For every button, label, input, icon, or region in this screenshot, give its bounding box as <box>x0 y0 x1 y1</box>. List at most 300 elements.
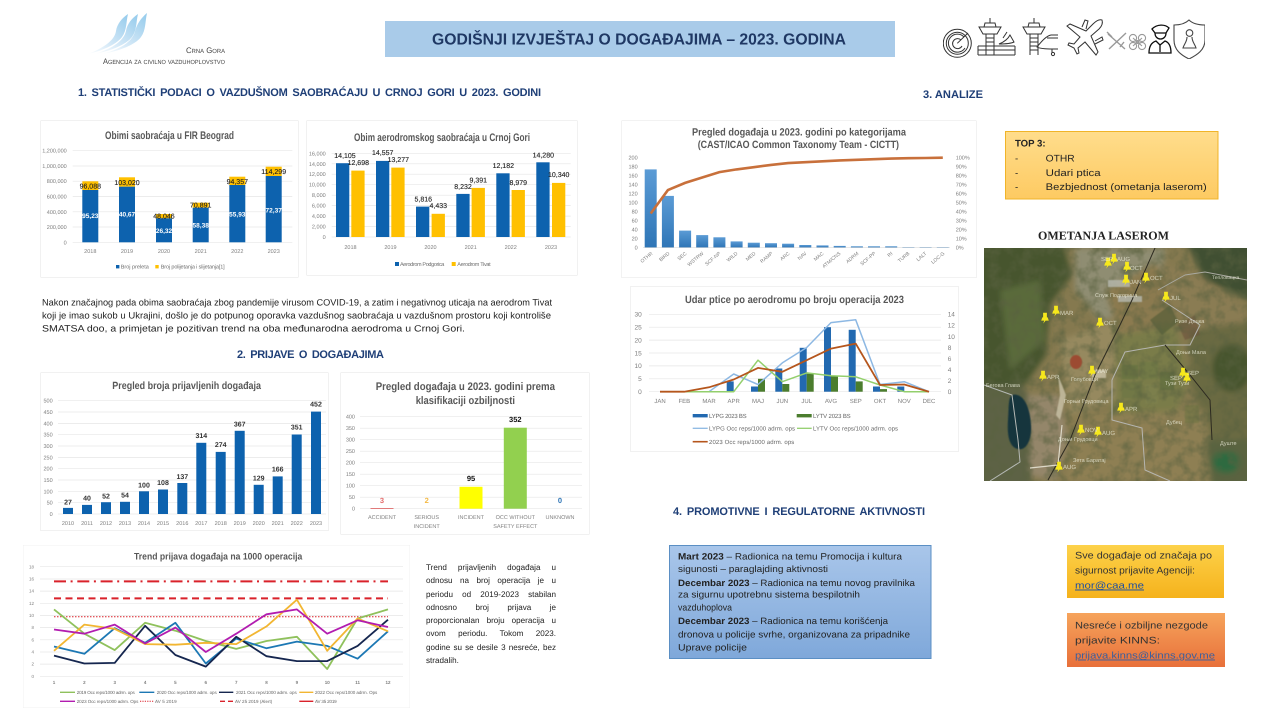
legend: 2020 Occ reps/1000 adrm. ops <box>157 690 217 695</box>
x axis labels: 1 <box>53 680 56 685</box>
left axis labels <box>629 156 638 252</box>
right axis labels: 100% <box>956 156 970 162</box>
category labels: NOV <box>898 398 911 405</box>
x axis labels: 4 <box>144 680 147 685</box>
pin labels: JAN <box>1130 279 1141 286</box>
category labels: 2018 <box>344 245 357 251</box>
category labels: 2011 <box>81 521 93 527</box>
terrain <box>984 248 1247 481</box>
heading: section 2: 2. PRIJAVE O DOGAĐAJIMA <box>237 349 384 361</box>
left axis labels: 10 <box>634 363 642 370</box>
callout text <box>1015 138 1207 193</box>
y axis labels: 8 <box>31 625 34 630</box>
y axis labels <box>309 151 326 241</box>
category labels: 2020 <box>253 521 265 527</box>
y axis labels: 400 <box>44 421 53 427</box>
texture <box>984 248 1247 481</box>
y axis labels: 16,000 <box>309 151 326 157</box>
category labels: OKT <box>874 398 886 405</box>
x axis labels <box>53 680 391 685</box>
category labels: 2019 <box>384 245 397 251</box>
trend paragraph: periodu od 2019-2023 stabilan <box>426 590 556 599</box>
heading: section 1: 1. STATISTIČKI PODACI O VAZDUŠNOM SAOBRAĆAJU U CRNOJ GORI U 2023. GODINI <box>78 86 541 99</box>
pin labels: AUG <box>1063 464 1076 471</box>
category labels <box>344 245 557 251</box>
category labels: SCF-NP <box>704 251 723 268</box>
legend <box>693 413 898 446</box>
data labels: 52 <box>102 494 110 500</box>
data labels: 5,816 <box>415 196 432 204</box>
category labels: OCC WITHOUT <box>496 515 536 521</box>
intro paragraph: SMATSA doo, a primjetan je pozitivan trend na oba međunarodna aerodroma u Crnoj Gori. <box>42 324 465 334</box>
x axis labels: 6 <box>205 680 208 685</box>
trend paragraph: odnosu na broj operacija je u <box>426 576 556 585</box>
category labels: RI <box>887 251 894 259</box>
y axis labels: 14 <box>29 589 34 594</box>
logo text: state: Crna Gora <box>186 46 225 55</box>
logo text: agency name: Agencija za civilno vazduhoplovstvo <box>103 57 225 66</box>
data labels: 48,046 <box>153 214 175 220</box>
x axis labels: 11 <box>355 680 360 685</box>
y axis labels: 300 <box>346 438 355 444</box>
category labels: 2017 <box>195 521 207 527</box>
callout text: TOP 3: <box>1015 138 1046 150</box>
data labels: 14,557 <box>372 150 394 157</box>
y axis labels: 8,000 <box>312 193 326 199</box>
y axis labels: 100 <box>346 484 355 490</box>
category labels: 2020 <box>424 245 437 251</box>
category labels: NAV <box>797 251 809 262</box>
data labels: 129 <box>253 476 265 482</box>
category labels <box>654 398 936 405</box>
right axis labels: 50% <box>956 201 967 207</box>
icon: officer <box>1149 25 1171 53</box>
category labels: 2016 <box>176 521 188 527</box>
category labels: FEB <box>678 398 690 405</box>
category labels: 2014 <box>138 521 150 527</box>
activity list: Mart 2023 – Radionica na temu Promocija i kultura <box>678 552 903 562</box>
y axis labels: 12,000 <box>309 172 326 178</box>
category labels: LALT <box>916 251 928 263</box>
trend paragraph <box>426 561 556 668</box>
category labels: SCF-PP <box>859 251 878 267</box>
legend: 2023 Occ reps/1000 adrm. ops <box>709 439 794 446</box>
y axis labels: 0 <box>64 240 67 246</box>
trend paragraph: odnosno broj prijava je <box>426 603 556 612</box>
y axis labels: 250 <box>44 455 53 461</box>
legend: LYTV Occ reps/1000 adrm. ops <box>813 426 898 432</box>
data labels: 114,299 <box>261 169 286 176</box>
icon: light aircraft <box>1107 32 1126 49</box>
callout text: prijavite KINNS: <box>1075 636 1160 646</box>
callout text: - <box>1015 154 1018 164</box>
data labels <box>80 169 286 235</box>
legend <box>60 690 378 704</box>
legend: Broj preleta <box>121 265 150 271</box>
category labels <box>368 515 575 530</box>
y axis labels: 150 <box>44 478 53 484</box>
lake <box>1008 395 1031 449</box>
title banner: GODIŠNJI IZVJEŠTAJ O DOGAĐAJIMA – 2023. GODINA <box>432 30 846 48</box>
activity list: za sigurnu upotrebnu sistema bespilotnih <box>678 590 860 600</box>
icon: shield with pawn <box>1174 20 1205 59</box>
y axis labels: 350 <box>44 433 53 439</box>
data labels: 40,67 <box>119 212 136 219</box>
category labels: 2022 <box>291 521 303 527</box>
chart: reported events per year <box>40 372 328 531</box>
left axis labels: 60 <box>632 219 638 225</box>
left axis labels: 15 <box>634 350 642 357</box>
data labels: 3 <box>380 496 384 505</box>
category labels: APR <box>728 398 741 405</box>
callout text: Udari ptica <box>1046 168 1101 179</box>
icon: airliner <box>1067 20 1103 55</box>
category labels: AVG <box>825 398 837 405</box>
category labels: DEC <box>923 398 936 405</box>
legend: 2021 Occ reps/1000 adrm. ops <box>236 690 297 695</box>
y axis labels: 1,000,000 <box>42 164 67 170</box>
data labels <box>64 402 322 506</box>
y axis labels: 0 <box>352 507 355 513</box>
bars <box>645 169 949 248</box>
data labels: 70,891 <box>190 202 212 210</box>
category labels: WSTRW <box>687 251 705 268</box>
legend: AV 5 2019 <box>155 699 177 704</box>
data labels: 95,23 <box>82 213 99 220</box>
right axis labels: 60% <box>956 192 967 198</box>
left axis labels: 20 <box>632 237 638 243</box>
category labels: 2018 <box>84 249 96 255</box>
pin labels: APR <box>1047 374 1060 381</box>
map: laser interference locations <box>984 248 1247 481</box>
category labels: UNKNOWN <box>545 515 575 521</box>
place names <box>986 275 1240 464</box>
place names: Бегова Глава <box>986 383 1021 389</box>
category labels: 2015 <box>157 521 169 527</box>
y axis labels: 50 <box>349 495 355 501</box>
data labels: 12,698 <box>348 160 369 167</box>
category labels: RAMP <box>759 251 775 265</box>
legend: AV 25 2019 (Alert) <box>235 699 273 704</box>
category labels: ADRM <box>845 251 860 265</box>
category labels: ARC <box>779 251 792 262</box>
right axis labels <box>948 312 955 396</box>
data labels: 55,93 <box>229 211 246 218</box>
right axis labels: 2 <box>948 378 952 385</box>
left axis labels: 140 <box>629 183 638 189</box>
legend: AV 35 2019 <box>315 699 337 704</box>
data labels <box>334 150 570 210</box>
x axis labels: 7 <box>235 680 238 685</box>
data labels <box>380 415 562 505</box>
light built-up areas <box>1056 280 1142 420</box>
y axis labels: 250 <box>346 449 355 455</box>
pin labels: OCT <box>1104 320 1117 327</box>
place names: Доњи Мала <box>1176 350 1207 356</box>
category labels: JUL <box>801 398 813 405</box>
category labels: 2012 <box>100 521 112 527</box>
right axis labels: 90% <box>956 165 967 171</box>
x axis labels: 2 <box>83 680 86 685</box>
data labels: 137 <box>176 474 188 481</box>
data labels: 0 <box>558 496 562 505</box>
data labels: 274 <box>215 442 227 449</box>
data labels: 108 <box>157 480 169 487</box>
data labels: 72,37 <box>266 207 282 214</box>
trend paragraph: Trend prijavljenih događaja u <box>426 563 556 572</box>
chart title: Obimi saobraćaja u FIR Beograd <box>105 130 234 142</box>
right axis labels: 0% <box>956 246 964 252</box>
chart title <box>376 381 556 407</box>
category labels: 2023 <box>268 249 280 255</box>
category labels: WILD <box>726 251 740 264</box>
chart title: Pregled broja prijavljenih događaja <box>112 380 261 392</box>
y axis labels: 400 <box>346 415 355 421</box>
data labels: 100 <box>138 482 150 490</box>
data labels: 26,32 <box>156 228 173 235</box>
data labels: 96,088 <box>80 184 101 190</box>
place names: Горњи Грудовица <box>1064 399 1109 405</box>
pin labels: JUL <box>1170 295 1181 302</box>
right axis labels: 6 <box>948 356 952 363</box>
y axis labels: 10,000 <box>309 183 326 189</box>
right axis labels: 4 <box>948 367 952 374</box>
left axis labels: 5 <box>638 376 642 383</box>
activity list: Uprave policije <box>678 643 747 653</box>
callout text: sigurnost prijavite Agenciji: <box>1075 566 1195 576</box>
right axis labels: 30% <box>956 219 967 225</box>
legend: 2022 Occ reps/1000 adrm. Ops <box>315 690 378 695</box>
callout text: Nesreće i ozbiljne nezgode <box>1075 620 1208 632</box>
category labels: 2019 <box>234 521 246 527</box>
category labels <box>62 521 322 527</box>
data labels: 95 <box>467 474 475 483</box>
y axis labels: 200,000 <box>47 225 67 231</box>
trend paragraph: ovom periodu. Tokom 2023. <box>426 629 556 638</box>
legend: Broj polijetanja i slijetanja[1] <box>161 265 225 271</box>
chart: report trend per 1000 operations <box>23 545 410 708</box>
right axis labels: 20% <box>956 228 967 234</box>
icon: control tower and aircraft <box>1023 18 1058 56</box>
callout: report to agency <box>1067 545 1224 598</box>
category labels: 2013 <box>119 521 131 527</box>
place names: Голубовци <box>1071 376 1098 383</box>
right axis labels: 70% <box>956 183 967 189</box>
data labels: 4,433 <box>430 203 447 210</box>
left axis labels <box>634 312 642 396</box>
category labels: 2023 <box>310 521 322 527</box>
category labels: MAC <box>813 251 826 263</box>
data labels: 54 <box>121 492 129 500</box>
intro paragraph: Nakon značajnog pada obima saobraćaja zbog pandemije virusom COVID-19, a zatim i negativnog uticaja na aerodrom Tivat <box>42 298 552 308</box>
icon: radar <box>943 29 971 57</box>
place names: Душте <box>1220 441 1237 447</box>
chart title: Trend prijava događaja na 1000 operacija <box>134 552 303 562</box>
y axis labels <box>346 415 355 513</box>
y axis labels: 50 <box>47 501 53 507</box>
y axis labels: 200 <box>346 461 355 467</box>
pin labels: SEP <box>1101 256 1113 263</box>
y axis labels <box>42 149 67 246</box>
chart: FIR Beograd traffic <box>40 120 298 278</box>
pin labels: AUG <box>1102 430 1115 437</box>
legend: LYTV 2023 BS <box>813 413 851 420</box>
y axis labels: 100 <box>44 489 53 495</box>
trend paragraph: proporcionalan broju operacija u <box>426 616 556 625</box>
y axis labels: 400,000 <box>47 210 67 216</box>
x axis labels: 3 <box>113 680 116 685</box>
category labels: INCIDENT <box>458 515 485 521</box>
activity list: Decembar 2023 – Radionica na temu novog pravilnika <box>678 578 916 588</box>
activity list: vazduhoplova <box>678 603 733 613</box>
right axis labels: 80% <box>956 174 967 180</box>
x axis labels: 9 <box>296 680 299 685</box>
right axis labels: 10% <box>956 237 967 243</box>
y axis labels: 2 <box>31 662 34 667</box>
intro paragraph <box>42 298 552 334</box>
left axis labels: 160 <box>629 174 638 180</box>
lines <box>660 320 929 392</box>
data labels: 8,232 <box>454 184 472 191</box>
y axis labels: 16 <box>29 577 34 582</box>
legend: LYPG 2023 BS <box>709 413 747 420</box>
clustered bars <box>336 161 565 237</box>
right axis labels: 14 <box>948 312 955 319</box>
category labels: 2010 <box>62 521 74 527</box>
callout text: Sve događaje od značaja po <box>1075 550 1212 562</box>
y axis labels <box>44 399 53 518</box>
x axis labels: 5 <box>174 680 177 685</box>
category labels: BIRD <box>658 251 672 263</box>
heading: laser interference: OMETANJA LASEROM <box>1038 228 1169 242</box>
legend: Aerodrom Tivat <box>457 262 491 268</box>
category labels: 2021 <box>195 249 207 255</box>
data labels: 27 <box>64 500 72 506</box>
category labels: ATM/CNS <box>821 251 843 270</box>
right axis labels: 12 <box>948 323 955 330</box>
logo feathers <box>88 13 147 54</box>
category labels: INCIDENT <box>414 524 440 530</box>
category labels: 2021 <box>272 521 284 527</box>
right axis labels: 10 <box>948 334 955 341</box>
data labels: 10,340 <box>548 172 570 179</box>
y axis labels: 6 <box>31 637 34 642</box>
x axis labels: 8 <box>265 680 268 685</box>
legend <box>116 265 225 271</box>
place names: Дубец <box>1166 419 1183 426</box>
pin labels: NOV <box>1085 427 1098 434</box>
pin labels: OCT <box>1150 275 1163 282</box>
x axis labels: 12 <box>385 680 391 685</box>
category labels <box>640 251 946 270</box>
category labels: 2023 <box>545 245 557 251</box>
category labels <box>84 249 280 255</box>
legend: Aerodrom Podgorica <box>400 262 445 268</box>
icon: drone <box>1129 34 1146 50</box>
category labels: ACCIDENT <box>368 515 397 521</box>
activity list: Decembar 2023 – Radionica na temu korišćenja <box>678 616 889 626</box>
data labels: 314 <box>195 433 207 440</box>
activity list: dronova u policije svrhe, organizovana za pripadnike <box>678 630 910 640</box>
place names: Доњи Грудовци <box>1058 437 1098 443</box>
place names: Зета Баратај <box>1073 458 1106 464</box>
right axis labels <box>956 156 970 252</box>
activity list: sigunosti – paraglajding aktivnosti <box>678 564 828 574</box>
pin labels: SEP <box>1170 375 1182 382</box>
y axis labels: 4 <box>31 650 34 655</box>
map pins <box>1039 254 1191 473</box>
logo: agency <box>88 13 225 66</box>
cumulative line <box>651 158 943 214</box>
place names: Ризе Доцка <box>1175 319 1205 325</box>
left axis labels: 20 <box>634 337 642 344</box>
category labels: LOC-G <box>930 251 946 266</box>
category labels: 2020 <box>158 249 170 255</box>
chart title: klasifikaciji ozbiljnosti <box>416 395 515 407</box>
chart title: Udar ptice po aerodromu po broju operacija 2023 <box>685 294 904 306</box>
pin labels: AUG <box>1117 256 1130 263</box>
category labels: JAN <box>654 398 666 405</box>
heading: section 4: 4. PROMOTIVNE I REGULATORNE AKTIVNOSTI <box>673 506 925 518</box>
y axis labels: 0 <box>323 235 326 241</box>
left axis labels: 100 <box>629 201 638 207</box>
data labels: 94,357 <box>227 179 248 186</box>
chart: events by severity <box>340 372 590 534</box>
trend lines <box>54 600 388 669</box>
activity list <box>678 552 916 653</box>
pin labels: SEP <box>1187 370 1199 377</box>
y axis labels: 600,000 <box>47 194 67 200</box>
category labels: 2018 <box>215 521 227 527</box>
right axis labels: 8 <box>948 345 952 352</box>
callout text: - <box>1015 168 1018 179</box>
category labels: SEC <box>677 251 689 262</box>
y axis labels: 200 <box>44 467 53 473</box>
data labels: 452 <box>310 402 322 408</box>
callout text <box>1075 550 1212 592</box>
y axis labels: 150 <box>346 472 355 478</box>
chart title <box>692 126 906 151</box>
category labels: JUN <box>776 398 788 405</box>
y axis labels: 2,000 <box>312 224 326 230</box>
pin labels <box>1047 256 1199 471</box>
chart: aerodrome traffic <box>306 120 578 276</box>
chart title: Obim aerodromskog saobraćaja u Crnoj Gori <box>354 132 530 144</box>
data labels: 12,182 <box>493 163 514 170</box>
red mine pond <box>1070 355 1082 369</box>
data labels: 14,105 <box>334 153 356 160</box>
data labels: 14,280 <box>533 152 554 160</box>
category labels: SERIOUS <box>414 515 439 521</box>
left axis labels: 200 <box>629 156 638 162</box>
category labels: 2022 <box>505 245 517 251</box>
y axis labels: 350 <box>346 426 355 432</box>
chart: bird strikes by aerodrome <box>630 286 959 452</box>
data labels: 2 <box>425 496 429 505</box>
category labels: OTHR <box>640 251 655 265</box>
left axis labels: 30 <box>634 312 642 319</box>
legend <box>395 262 491 268</box>
callout: top 3 <box>1006 132 1218 199</box>
bars <box>63 412 321 514</box>
bars <box>370 428 527 509</box>
y axis labels: 300 <box>44 444 53 450</box>
y axis labels <box>29 564 34 679</box>
title banner <box>385 21 895 57</box>
category labels: SEP <box>850 398 862 405</box>
data labels: 40 <box>83 496 91 502</box>
icon: control tower and terminal <box>978 18 1015 55</box>
